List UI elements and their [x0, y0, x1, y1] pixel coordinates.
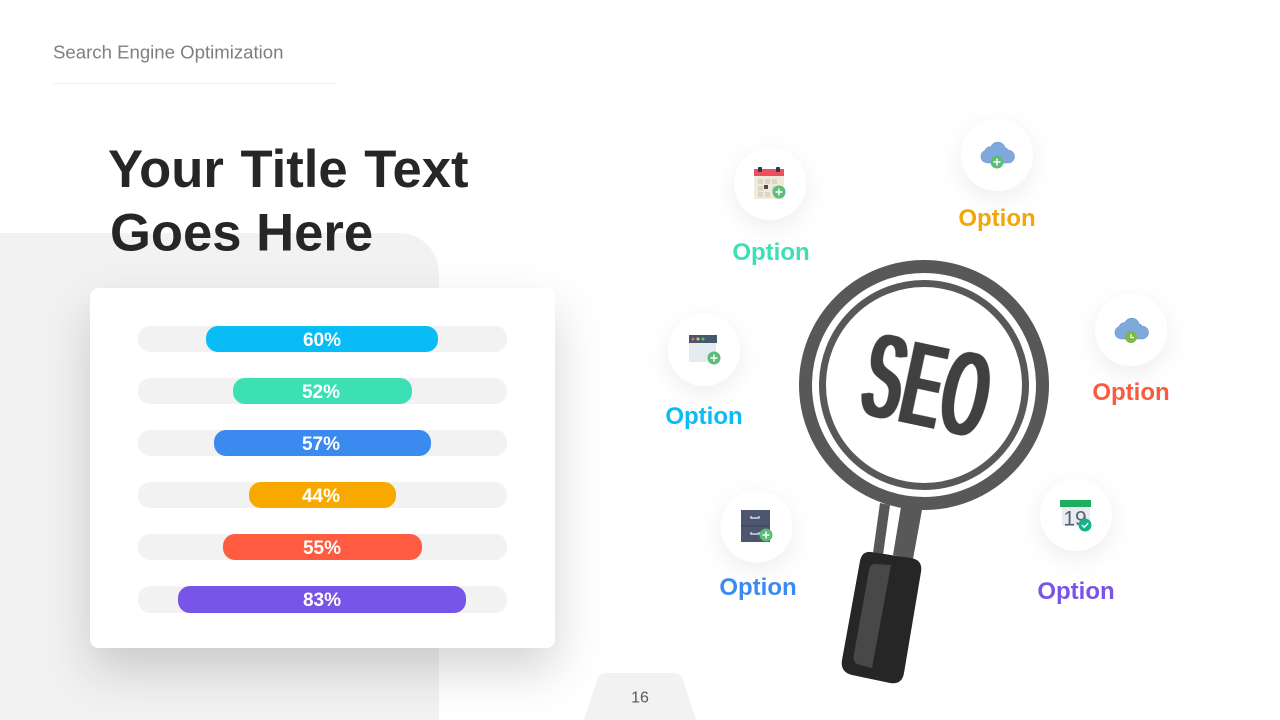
page number tab: 16	[631, 690, 649, 706]
bar 52%: 52%	[302, 382, 340, 403]
label: Option	[1092, 379, 1170, 406]
lens rings	[806, 266, 1042, 504]
label: Option	[665, 403, 743, 430]
bar 60%	[138, 326, 507, 352]
option: cloud clock (red)	[1092, 294, 1170, 406]
bar 55%: 55%	[303, 538, 341, 559]
option: cloud add (amber)	[958, 119, 1036, 232]
option: browser window (cyan)	[665, 314, 743, 430]
option: date check (purple)	[1037, 479, 1115, 605]
SEO lettering: SEO	[851, 307, 1003, 467]
icon: browser window add	[689, 335, 720, 364]
option: file cabinet (blue)	[719, 490, 797, 601]
panel: progress bars card	[90, 288, 555, 648]
background panel	[0, 233, 439, 720]
option: calendar (teal)	[732, 148, 810, 266]
handle stems	[873, 503, 922, 559]
bar 44%	[138, 482, 507, 508]
label: Option	[958, 205, 1036, 232]
page number tab	[584, 673, 696, 720]
icon: calendar add	[754, 167, 786, 199]
bar 44%: 44%	[302, 486, 340, 507]
title: Your Title Text	[108, 140, 469, 199]
bar 83%	[138, 586, 507, 613]
icon: cloud add	[981, 142, 1015, 168]
magnifying glass	[806, 266, 1042, 683]
bar 83%: 83%	[303, 590, 341, 611]
bar 52%	[138, 378, 507, 404]
bar 57%	[138, 430, 507, 456]
label: Option	[1037, 578, 1115, 605]
label: Option	[719, 574, 797, 601]
icon: calendar date check: 19	[1063, 508, 1087, 530]
icon: cloud clock	[1115, 318, 1149, 343]
label: Option	[732, 239, 810, 266]
title	[108, 140, 469, 262]
icon: file cabinet add	[741, 510, 772, 542]
bar 57%: 57%	[302, 434, 340, 455]
title: Goes Here	[110, 204, 373, 262]
header text: Search Engine Optimization	[53, 42, 283, 62]
bar 60%: 60%	[303, 330, 341, 351]
bar 55%	[138, 534, 507, 560]
handle grip	[842, 552, 921, 683]
